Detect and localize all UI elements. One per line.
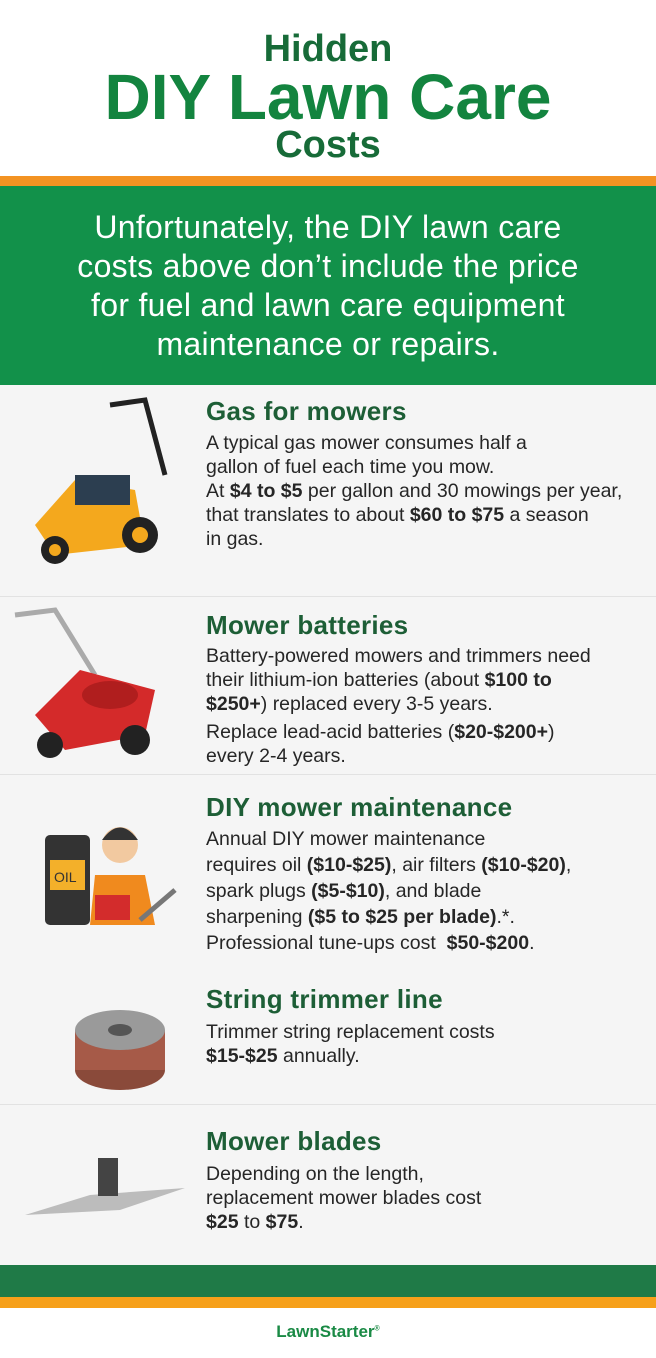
text: gallon of fuel each time you mow. xyxy=(206,456,494,478)
icon: spool xyxy=(75,1010,165,1090)
header background xyxy=(0,0,656,176)
text: Professional tune-ups cost $50-$200. xyxy=(206,932,534,954)
text: sharpening ($5 to $25 per blade).*. xyxy=(206,906,515,928)
text: $25 to $75. xyxy=(206,1211,304,1233)
text: requires oil ($10-$25), air filters ($10-$20), xyxy=(206,854,571,876)
icon: red mower xyxy=(14,607,155,758)
intro banner: Unfortunately, the DIY lawn care xyxy=(94,209,562,245)
text: Battery-powered mowers and trimmers need xyxy=(206,645,591,667)
text: every 2-4 years. xyxy=(206,745,346,767)
icon: mechanic with oil xyxy=(45,827,176,925)
heading: Gas for mowers xyxy=(206,396,407,426)
icon: blade xyxy=(26,1158,184,1215)
text: replacement mower blades cost xyxy=(206,1187,481,1209)
text: Annual DIY mower maintenance xyxy=(206,828,485,850)
text: their lithium-ion batteries (about $100 to xyxy=(206,669,552,691)
title: DIY Lawn Care xyxy=(105,61,551,133)
heading: String trimmer line xyxy=(206,984,443,1014)
text: $15-$25 annually. xyxy=(206,1045,360,1067)
section: maintenance xyxy=(45,792,571,954)
logo: LawnStarter® xyxy=(276,1322,380,1341)
bottom green band xyxy=(0,1265,656,1297)
title: Hidden xyxy=(264,28,392,70)
orange band xyxy=(0,176,656,186)
title xyxy=(105,28,551,166)
section: trimmer xyxy=(75,984,495,1090)
heading: DIY mower maintenance xyxy=(206,792,512,822)
heading: Mower batteries xyxy=(206,610,408,640)
bottom orange band xyxy=(0,1297,656,1308)
heading: Mower blades xyxy=(206,1126,382,1156)
intro banner: costs above don’t include the price xyxy=(77,248,579,284)
text: that translates to about $60 to $75 a season xyxy=(206,504,589,526)
text xyxy=(206,1021,495,1067)
text: Replace lead-acid batteries ($20-$200+) xyxy=(206,721,555,743)
text xyxy=(206,645,591,767)
intro banner: maintenance or repairs. xyxy=(156,326,500,362)
section: gas xyxy=(35,396,622,564)
text: in gas. xyxy=(206,528,263,550)
intro banner xyxy=(0,186,656,385)
text: Trimmer string replacement costs xyxy=(206,1021,495,1043)
title: Costs xyxy=(275,124,381,166)
section: blades xyxy=(26,1126,482,1233)
text: $250+) replaced every 3-5 years. xyxy=(206,693,493,715)
text: A typical gas mower consumes half a xyxy=(206,432,527,454)
intro banner: for fuel and lawn care equipment xyxy=(91,287,565,323)
icon: yellow mower xyxy=(35,397,168,564)
text xyxy=(206,828,571,954)
text xyxy=(206,432,622,550)
text: At $4 to $5 per gallon and 30 mowings per year, xyxy=(206,480,622,502)
text: Depending on the length, xyxy=(206,1163,424,1185)
text: spark plugs ($5-$10), and blade xyxy=(206,880,481,902)
text xyxy=(206,1163,482,1233)
icon: mechanic with oil: OIL xyxy=(54,869,77,885)
section: batteries xyxy=(14,607,591,767)
